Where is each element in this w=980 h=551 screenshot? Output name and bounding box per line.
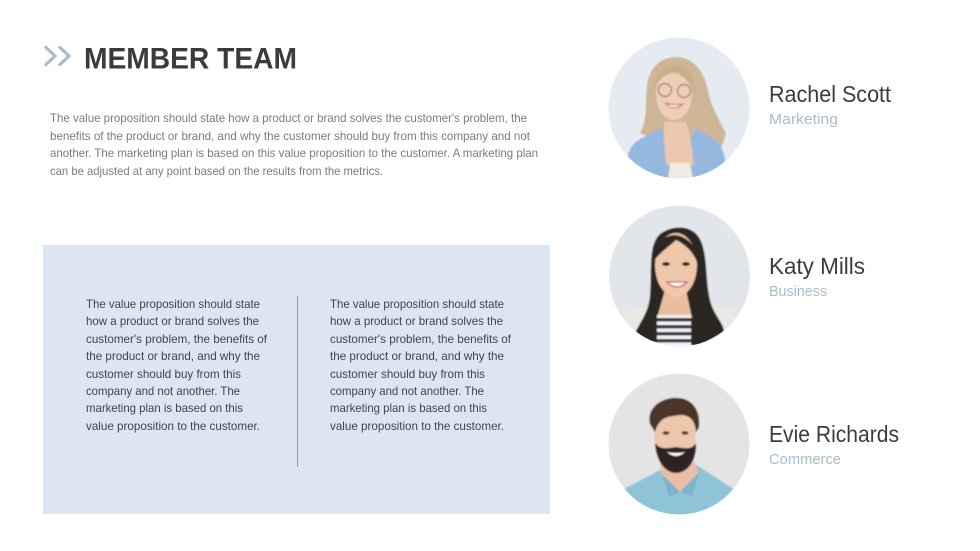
name: Katy Mills: Katy Mills: [769, 253, 865, 279]
portrait: Rachel Scott: [608, 38, 750, 178]
text block: left column: marketing plan is based on this: [86, 401, 243, 415]
icon: double chevron: [45, 46, 69, 66]
role: Business: Business: [769, 284, 827, 300]
text block: left column: customer's problem, the benefits of: [86, 332, 268, 346]
text block: left column: The value proposition should state: [86, 297, 260, 311]
role: Marketing: Marketing: [769, 112, 838, 128]
panel: blue value proposition box: [43, 245, 550, 514]
text block: left column: value proposition to the customer.: [86, 419, 260, 433]
text block: left column: company and not another. The: [86, 384, 240, 398]
text block: right column: company and not another. The: [330, 384, 484, 398]
text block: left column: how a product or brand solves the: [86, 314, 259, 328]
text block: right column: [330, 297, 512, 433]
text block: introduction: another. The marketing plan is based on this value proposition to the customer. A marketing plan: [50, 146, 538, 160]
portrait: Katy Mills: [609, 206, 750, 346]
text block: right column: the product or brand, and why the: [330, 349, 504, 363]
text block: introduction: [50, 111, 538, 178]
title: MEMBER TEAM: [84, 42, 297, 76]
text block: right column: value proposition to the customer.: [330, 419, 504, 433]
text block: right column: how a product or brand solves the: [330, 314, 503, 328]
text block: introduction: can be adjusted at any point based on the results from the metrics.: [50, 164, 383, 178]
text block: right column: customer should buy from this: [330, 367, 485, 381]
portrait: Evie Richards: [608, 374, 750, 514]
text block: right column: marketing plan is based on this: [330, 401, 487, 415]
text block: right column: The value proposition should state: [330, 297, 504, 311]
text block: introduction: benefits of the product or brand, and why the customer should buy from this company and not: [50, 129, 531, 143]
text block: introduction: The value proposition should state how a product or brand solves the customer's problem, the: [50, 111, 527, 125]
text block: left column: customer should buy from this: [86, 367, 241, 381]
text block: right column: customer's problem, the benefits of: [330, 332, 512, 346]
text block: left column: [86, 297, 268, 433]
name: Evie Richards: Evie Richards: [769, 421, 899, 447]
text block: left column: the product or brand, and why the: [86, 349, 260, 363]
role: Commerce: Commerce: [769, 452, 841, 468]
name: Rachel Scott: Rachel Scott: [769, 81, 892, 107]
